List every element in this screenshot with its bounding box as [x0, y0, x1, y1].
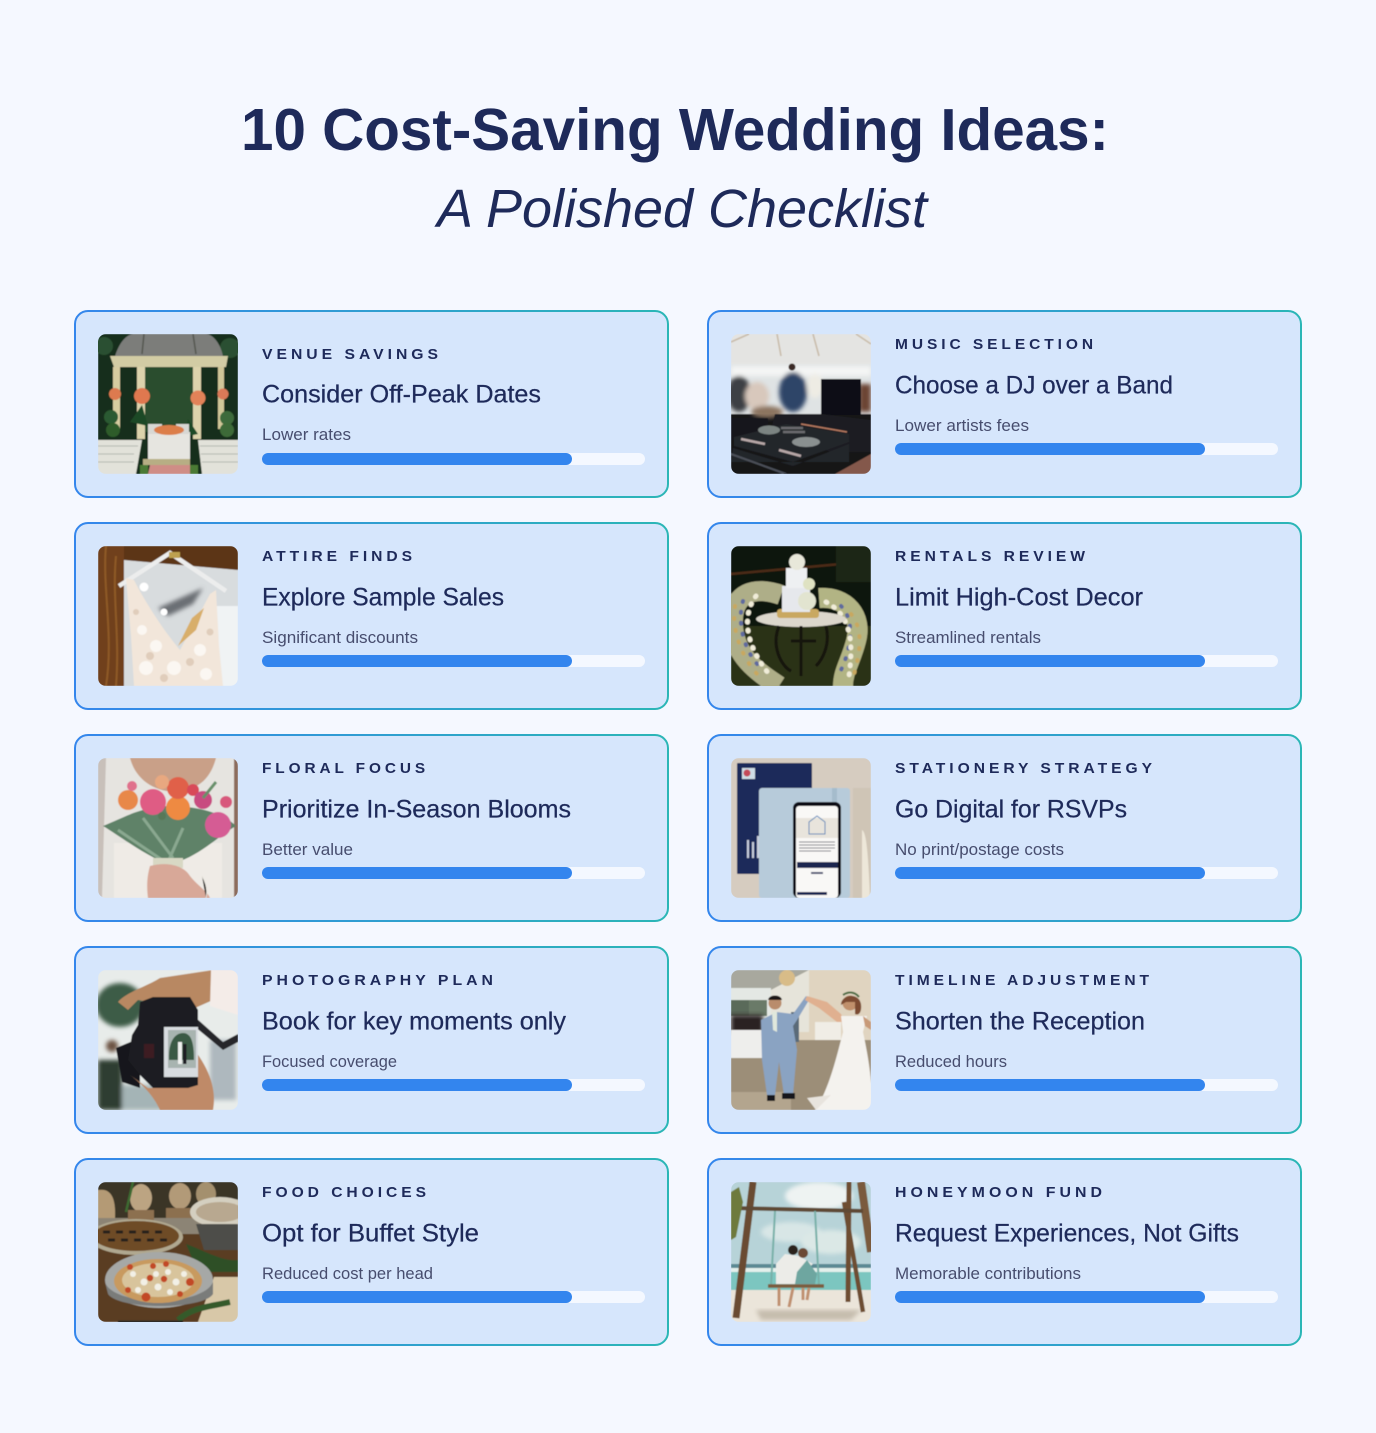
photo: DJ booth [727, 334, 871, 474]
panel: attire finds [75, 523, 668, 709]
panel: venue savings [75, 311, 668, 497]
photo: buffet platters [98, 1182, 238, 1322]
photo: cake and floral arch [731, 546, 871, 686]
progress bar [262, 453, 645, 465]
heading: Book for key moments only [262, 1008, 567, 1036]
description: Streamlined rentals [895, 629, 1041, 647]
description: No print/postage costs [895, 841, 1064, 859]
panel: music selection [708, 311, 1301, 497]
progress bar [895, 1291, 1278, 1303]
description: Reduced hours [895, 1053, 1007, 1071]
heading: Limit High-Cost Decor [895, 584, 1143, 612]
label: ATTIRE FINDS [262, 548, 416, 565]
progress bar [262, 1079, 645, 1091]
panel: rentals review [708, 523, 1301, 709]
heading: Shorten the Reception [895, 1008, 1145, 1036]
label: MUSIC SELECTION [895, 336, 1097, 353]
progress bar [262, 1291, 645, 1303]
photo: garden gazebo [95, 334, 240, 474]
progress bar [895, 655, 1278, 667]
description: Significant discounts [262, 629, 418, 647]
description: Lower rates [262, 426, 351, 444]
photo: couple dancing [731, 970, 872, 1110]
label: TIMELINE ADJUSTMENT [895, 972, 1153, 989]
photo: camera in hands [96, 970, 238, 1110]
label: STATIONERY STRATEGY [895, 760, 1156, 777]
description: Focused coverage [262, 1053, 397, 1071]
label: RENTALS REVIEW [895, 548, 1089, 565]
progress bar [895, 443, 1278, 455]
heading: Prioritize In-Season Blooms [262, 796, 571, 824]
progress bar [262, 655, 645, 667]
heading: Request Experiences, Not Gifts [895, 1220, 1239, 1248]
description: Better value [262, 841, 353, 859]
description: Memorable contributions [895, 1265, 1081, 1283]
panel: stationery strategy [708, 735, 1301, 921]
panel: food choices [75, 1159, 668, 1345]
panel: floral focus [75, 735, 668, 921]
label: HONEYMOON FUND [895, 1184, 1106, 1201]
panel: photography plan [75, 947, 668, 1133]
label: VENUE SAVINGS [262, 346, 442, 363]
photo: bridal bouquet [98, 758, 238, 898]
panel: timeline adjustment [708, 947, 1301, 1133]
subtitle: A Polished Checklist [434, 179, 929, 239]
title: 10 Cost-Saving Wedding Ideas: [241, 97, 1109, 163]
description: Lower artists fees [895, 417, 1029, 435]
progress bar [895, 1079, 1278, 1091]
description: Reduced cost per head [262, 1265, 433, 1283]
photo: wedding dress [98, 546, 238, 686]
heading: Consider Off-Peak Dates [262, 380, 541, 408]
heading: Opt for Buffet Style [262, 1220, 479, 1248]
heading: Explore Sample Sales [262, 584, 504, 612]
heading: Choose a DJ over a Band [895, 372, 1173, 400]
label: FOOD CHOICES [262, 1184, 430, 1201]
photo: digital RSVP on phone [731, 758, 871, 898]
photo: beach swing [731, 1182, 871, 1322]
heading: Go Digital for RSVPs [895, 796, 1127, 824]
panel: honeymoon fund [708, 1159, 1301, 1345]
label: PHOTOGRAPHY PLAN [262, 972, 497, 989]
label: FLORAL FOCUS [262, 760, 429, 777]
progress bar [895, 867, 1278, 879]
progress bar [262, 867, 645, 879]
